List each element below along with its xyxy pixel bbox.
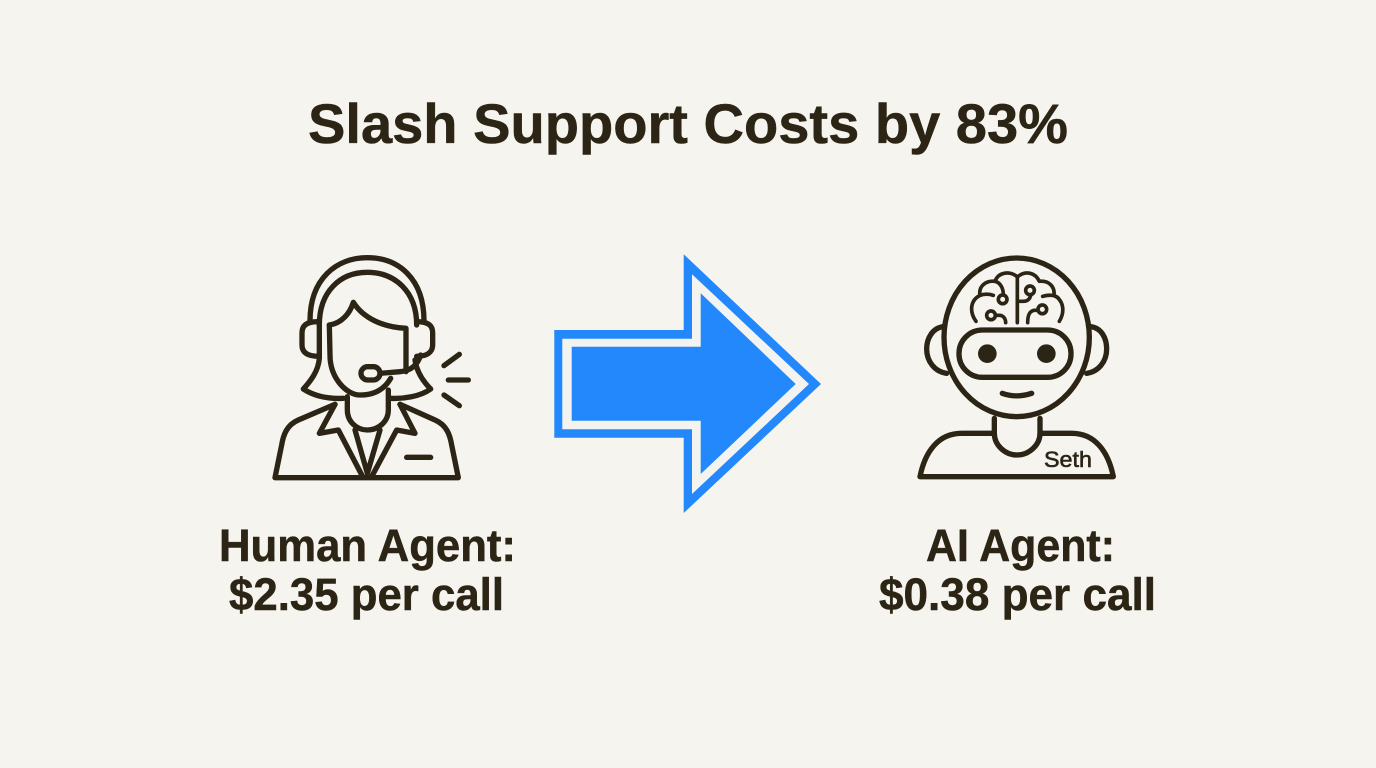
icon: human agent with headset [275, 258, 468, 478]
label: AI agent cost: $0.38 per call [879, 569, 1156, 620]
label: AI agent cost: AI Agent: [926, 520, 1115, 571]
label: human agent cost: $2.35 per call [229, 569, 504, 620]
icon: AI agent robot [920, 258, 1113, 477]
title: Slash Support Costs by 83% [308, 92, 1068, 155]
label: AI agent cost [879, 520, 1156, 620]
arrow [554, 254, 821, 513]
label: human agent cost [219, 520, 516, 620]
label: human agent cost: Human Agent: [219, 520, 516, 571]
name badge: Seth: Seth [1044, 447, 1092, 472]
icon: circuit brain [972, 273, 1063, 323]
